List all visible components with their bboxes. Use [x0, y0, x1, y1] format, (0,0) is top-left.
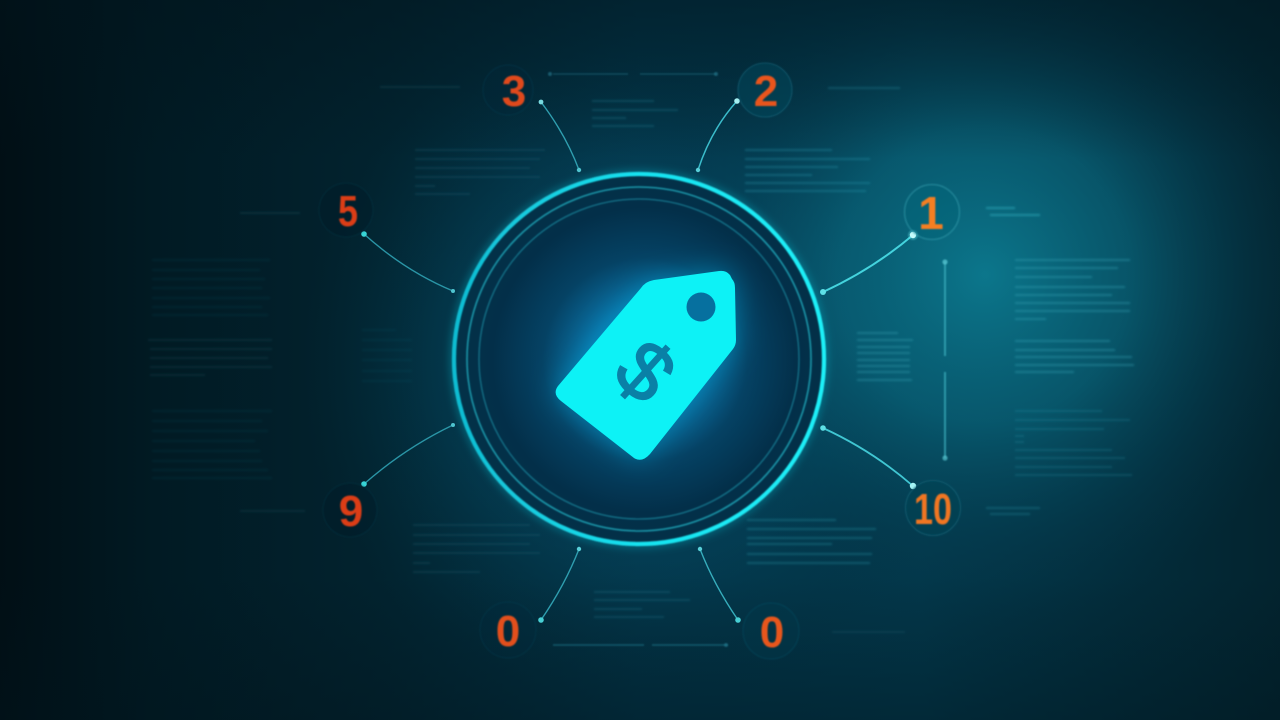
label: node 5 [240, 212, 300, 214]
node 9 [323, 483, 377, 537]
hub disc [455, 175, 823, 543]
panel: top and bottom text blocks [592, 88, 905, 632]
panel: left text blocks [148, 87, 545, 572]
lower right node: 0 [760, 608, 784, 657]
lower left node [480, 602, 536, 658]
label: lower right node [832, 631, 905, 633]
arrow: lower right node to hub [698, 547, 741, 623]
bracket: top horizontal line [548, 72, 718, 76]
text block: lower left [413, 525, 540, 572]
node 2 [738, 63, 792, 117]
lower right node [743, 603, 799, 659]
text block: far left middle [148, 340, 272, 375]
inner ring [479, 199, 799, 519]
node 9: 9 [339, 487, 363, 536]
middle ring [467, 187, 811, 531]
node 5 [319, 183, 373, 237]
label: node 9 [240, 510, 305, 512]
label: node 3 [380, 86, 460, 88]
node 5: 5 [338, 187, 358, 236]
bracket: left vertical line [333, 262, 335, 458]
text block: lower right [747, 520, 876, 563]
icon: price tag [556, 271, 736, 460]
outer glow [453, 173, 825, 545]
arrow: lower left node to hub [538, 547, 581, 623]
text block: upper right [745, 150, 870, 191]
connectors [361, 98, 918, 623]
text block: top center [592, 101, 678, 126]
arrow: node 1 to hub [820, 230, 918, 295]
node 1: 1 [918, 187, 944, 239]
text block: inner left [362, 330, 412, 381]
outer ring [454, 174, 824, 544]
lower left node: 0 [496, 607, 520, 656]
node 1 [904, 184, 960, 240]
panel: right text blocks [857, 208, 1134, 514]
arrow: node 10 to hub [820, 425, 916, 489]
icon glow [557, 271, 736, 460]
arrow: node 2 to hub [696, 98, 740, 172]
arrow: node 5 to hub [361, 231, 455, 293]
hub: price tag circle [453, 173, 825, 545]
label: node 2 [828, 87, 900, 89]
arrow: node 3 to hub [539, 100, 581, 172]
text block: right lower [1015, 411, 1132, 475]
text block: right top [1015, 260, 1130, 319]
text block: bottom center [594, 592, 690, 617]
label: node 10 [986, 508, 1040, 514]
bracket: right vertical line [942, 259, 948, 461]
node 3 [483, 65, 533, 116]
node 3: 3 [502, 67, 526, 116]
label: node 1 [986, 208, 1040, 215]
text block: inner right [857, 333, 913, 380]
bracket: bottom horizontal line [553, 643, 728, 647]
text block: right middle [1015, 341, 1134, 372]
node 2: 2 [754, 67, 778, 116]
icon: dollar sign: $ [598, 323, 692, 421]
text block: far left top [152, 260, 270, 315]
node 10: 10 [914, 485, 952, 534]
arrow: node 9 to hub [361, 423, 455, 487]
text block: far left lower [152, 411, 272, 478]
text block: upper left [415, 150, 545, 194]
